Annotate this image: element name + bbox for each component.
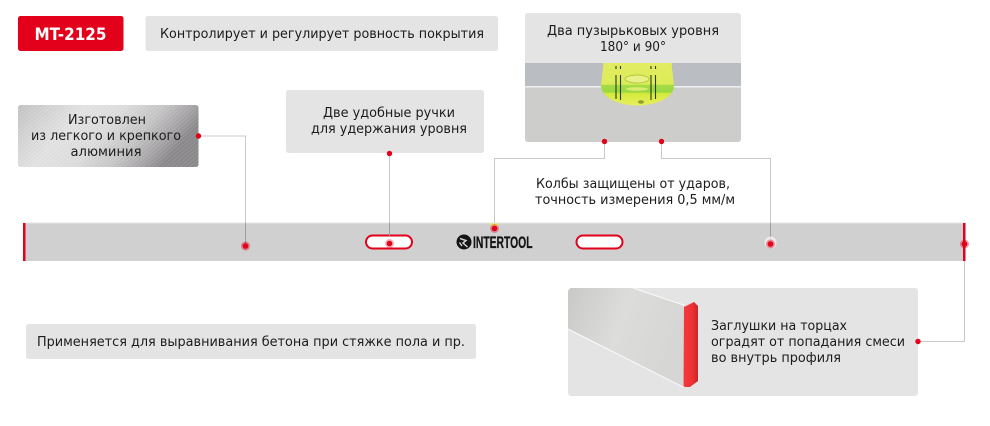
panel: application xyxy=(26,324,476,359)
panel: aluminium: алюминия xyxy=(70,145,142,160)
heading: purpose: Контролирует и регулирует ровность покрытия xyxy=(160,27,484,42)
model badge: MT-2125 xyxy=(34,25,106,44)
panel: aluminium: из легкого и крепкого xyxy=(31,129,181,144)
logo: INTERTOOL xyxy=(456,234,532,252)
panel: end caps: Заглушки на торцах xyxy=(711,319,847,334)
panel: handles: Две удобные ручки xyxy=(323,105,455,121)
panel: end caps xyxy=(568,288,918,396)
model badge xyxy=(18,16,124,51)
panel: application: Применяется для выравнивания бетона при стяжке пола и пр. xyxy=(37,334,465,350)
level photo xyxy=(525,63,741,142)
panel: aluminium xyxy=(18,105,198,167)
panel: aluminium: Изготовлен xyxy=(68,113,146,128)
handle slot: right xyxy=(576,236,622,248)
panel: bubble levels xyxy=(525,13,741,142)
icon: red end cap xyxy=(684,302,698,387)
panel: end caps: оградят от попадания смеси xyxy=(711,335,905,350)
panel: bubble levels: Два пузырьковых уровня xyxy=(547,24,719,39)
heading: purpose xyxy=(146,16,498,51)
leader lines xyxy=(198,136,964,342)
text: vial protection: Колбы защищены от ударов, xyxy=(536,176,730,192)
level bar xyxy=(23,222,966,261)
text: vial protection: точность измерения 0,5 мм/м xyxy=(535,193,735,208)
panel: handles xyxy=(286,90,484,153)
bar end: left xyxy=(23,223,26,261)
handle slot: left xyxy=(366,236,412,248)
panel: handles: для удержания уровня xyxy=(311,122,467,137)
profile illustration xyxy=(568,288,698,387)
bar end: right xyxy=(963,223,966,261)
panel: bubble levels: 180° и 90° xyxy=(600,40,666,55)
icon: bubble vial xyxy=(601,63,674,106)
panel: end caps: во внутрь профиля xyxy=(711,351,841,366)
logo: INTERTOOL: INTERTOOL xyxy=(473,234,532,252)
marker dots xyxy=(196,133,969,344)
text: vial protection xyxy=(535,176,735,208)
